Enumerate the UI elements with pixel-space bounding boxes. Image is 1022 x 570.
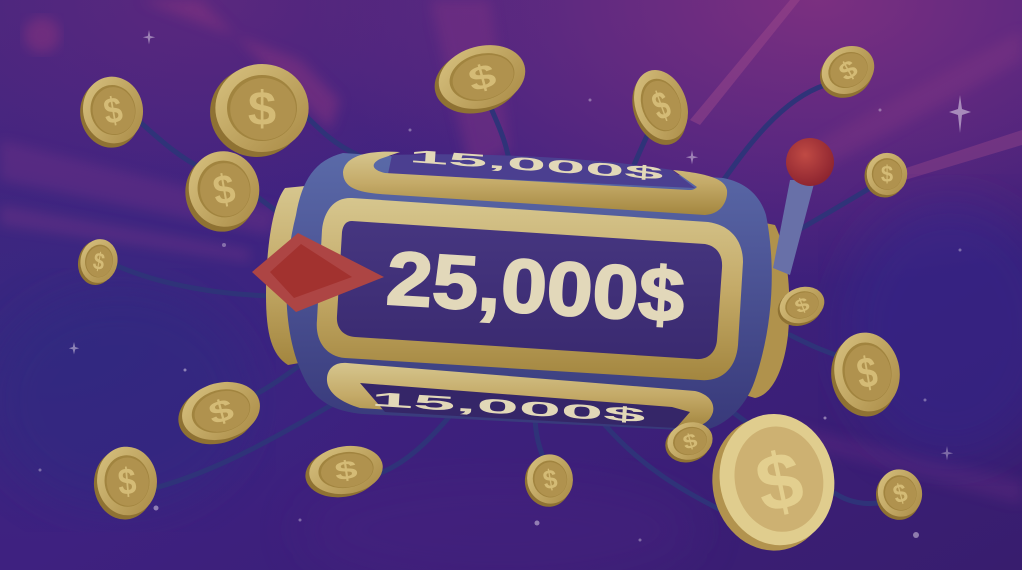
end cap: left — [266, 186, 305, 365]
drum body — [286, 153, 772, 431]
main window — [317, 198, 743, 380]
slot machine — [266, 138, 834, 431]
bottom reel value: 15,000$ — [370, 388, 646, 427]
jackpot value: 25,000$ — [384, 236, 687, 339]
large foreground coin — [700, 403, 847, 562]
end cap: right — [745, 222, 789, 398]
lever — [773, 138, 834, 275]
bottom reel — [327, 363, 713, 428]
connecting cables — [115, 85, 885, 512]
coins — [74, 36, 928, 525]
top reel value: 15,000$ — [408, 146, 664, 184]
red gem pointer — [252, 233, 384, 312]
top reel — [343, 146, 727, 215]
large foreground coin: $ — [748, 433, 810, 530]
